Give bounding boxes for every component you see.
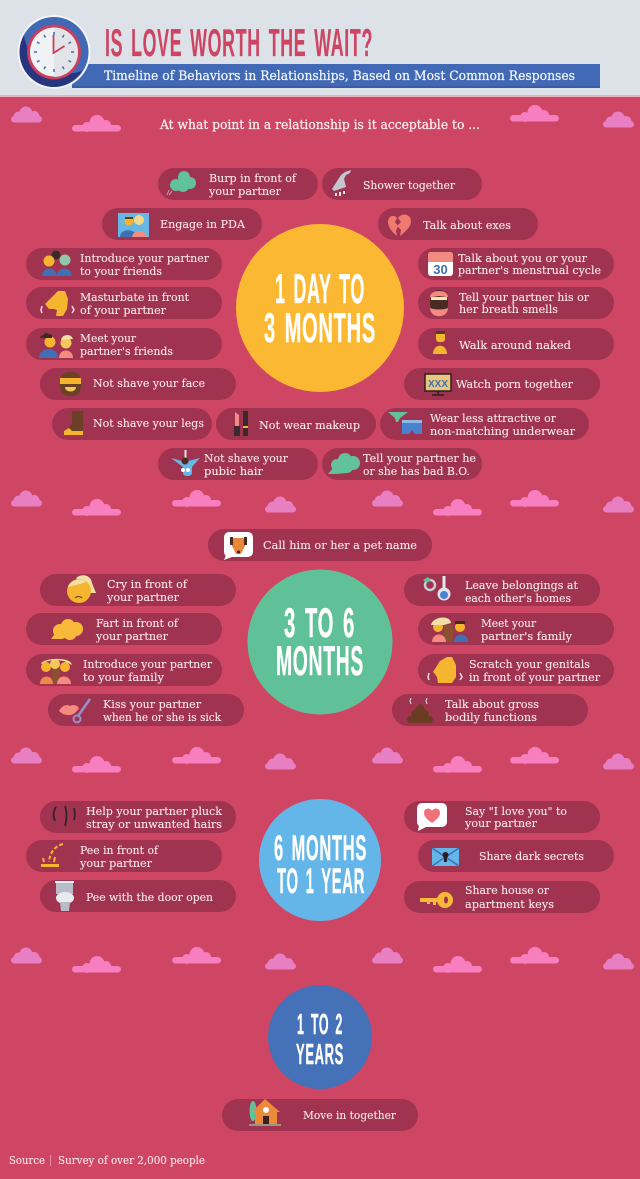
pill: meet family: partner's family <box>481 629 572 643</box>
pill: pluck hairs: stray or unwanted hairs <box>86 817 222 831</box>
circle: 6 months to 1 year <box>259 799 381 921</box>
pill: exes <box>378 208 538 240</box>
icon: house and tree <box>249 1099 281 1126</box>
pill: menstrual cycle: Talk about you or your <box>458 251 587 265</box>
pill: not shave face <box>40 368 236 400</box>
icon: three friends <box>42 250 72 276</box>
pill: fart <box>26 613 222 645</box>
pill: move in together <box>222 1099 418 1131</box>
pill: cry: Cry in front of <box>107 577 188 591</box>
icon: crying face <box>67 575 96 603</box>
circle: 1 day to 3 months: 1 DAY TO <box>275 265 365 312</box>
icon: broken heart <box>388 214 411 236</box>
icon: ring and perfume <box>423 576 450 600</box>
circle: 3 to 6 months <box>248 570 392 714</box>
pill: say I love you: Say "I love you" to <box>465 804 567 818</box>
pill: leave belongings: each other's homes <box>465 591 571 605</box>
pill: pluck hairs: Help your partner pluck <box>86 804 223 818</box>
pill: dark secrets: Share dark secrets <box>479 849 584 863</box>
icon: razor underwear <box>171 450 200 476</box>
pill: bad B.O. <box>322 448 482 480</box>
subtitle banner <box>72 64 600 88</box>
pill: burp: Burp in front of <box>209 171 297 185</box>
icon: keyhole envelope <box>432 848 459 866</box>
source line: Source <box>9 1153 45 1167</box>
pill: pluck hairs <box>40 801 236 833</box>
pill: introduce to family: to your family <box>83 670 164 684</box>
pill: fart: Fart in front of <box>96 616 179 630</box>
pill: pee in front: your partner <box>79 856 152 870</box>
icon: mismatched underwear <box>388 412 422 434</box>
pill: pee in front <box>26 840 222 872</box>
icon: heart speech bubble <box>417 803 447 831</box>
icon: clock <box>18 15 90 89</box>
icon: bearded face <box>60 372 81 396</box>
pill: not shave legs: Not shave your legs <box>93 416 204 430</box>
icon: lips and thermometer <box>59 699 90 722</box>
pill: share keys: Share house or <box>465 883 549 897</box>
icon: green burp cloud <box>167 171 196 195</box>
circle: 1 to 2 years <box>268 985 372 1089</box>
pill: introduce to friends: Introduce your partner <box>80 251 209 265</box>
subtitle banner: Timeline of Behaviors in Relationships, Based on Most Common Responses <box>104 69 575 84</box>
pill: exes: Talk about exes <box>423 218 511 232</box>
pill: introduce to family: Introduce your partner <box>83 657 212 671</box>
pill: not shave pubic hair <box>158 448 318 480</box>
header band <box>0 0 640 97</box>
clouds divider 3 <box>11 947 634 973</box>
icon: calendar 30: 30 <box>433 262 448 277</box>
icon: poop <box>407 698 433 723</box>
pill: menstrual cycle <box>418 248 614 280</box>
clouds: top left <box>11 106 121 132</box>
pill: share keys: apartment keys <box>465 897 554 911</box>
intro question: At what point in a relationship is it acceptable to ... <box>159 118 480 133</box>
pill: meet family: Meet your <box>481 616 536 630</box>
pill: meet family <box>418 613 614 645</box>
pill: cry: your partner <box>106 590 179 604</box>
pill: scratch: in front of your partner <box>469 670 600 684</box>
pill: breath <box>418 287 614 319</box>
pill: not shave pubic hair: Not shave your <box>204 451 288 465</box>
pill: meet friends: Meet your <box>80 331 136 345</box>
source line: Survey of over 2,000 people <box>58 1153 205 1167</box>
pill: door open: Pee with the door open <box>86 890 214 904</box>
pill: bad B.O.: or she has bad B.O. <box>363 464 470 478</box>
pill: kiss when sick: Kiss your partner <box>103 697 201 711</box>
icon: open mouth <box>430 290 448 316</box>
clouds: top right <box>510 105 634 128</box>
pill: gross functions <box>392 694 588 726</box>
pill: introduce to friends <box>26 248 222 280</box>
pill: bad B.O.: Tell your partner he <box>363 451 476 465</box>
pill: not shave face: Not shave your face <box>93 376 205 390</box>
pill: kiss when sick <box>48 694 244 726</box>
icon: calendar 30 <box>428 252 453 277</box>
pill: scratch: Scratch your genitals <box>469 657 590 671</box>
pill: underwear: Wear less attractive or <box>430 411 556 425</box>
icon: scratching hand <box>428 657 462 683</box>
pill: cry <box>40 574 236 606</box>
pill: pet name: Call him or her a pet name <box>263 538 417 552</box>
pill: masturbate <box>26 287 222 319</box>
icon: family <box>40 659 72 684</box>
icon: stray hairs <box>54 806 75 826</box>
pill: kiss when sick: when he or she is sick <box>103 710 222 724</box>
circle: 1 day to 3 months: 3 MONTHS <box>264 304 376 351</box>
pill: pee in front: Pee in front of <box>80 843 159 857</box>
pill: leave belongings <box>404 574 600 606</box>
pill: pet name <box>208 529 432 561</box>
pill: not wear makeup: Not wear makeup <box>259 418 360 432</box>
pill: burp: your partner <box>208 184 281 198</box>
pill: not wear makeup <box>216 408 376 440</box>
icon: dog speech bubble <box>224 532 253 560</box>
icon: lipstick and mascara <box>234 411 248 436</box>
icon: hairy leg <box>64 411 83 435</box>
circle: 1 to 2 years: 1 TO 2 <box>297 1009 343 1041</box>
icon: yellow hand <box>41 291 74 316</box>
pill: door open <box>40 880 236 912</box>
clouds divider 1 <box>11 490 634 516</box>
pill: say I love you <box>404 801 600 833</box>
icon: xxx screen: XXX <box>428 379 448 390</box>
pill: masturbate: Masturbate in front <box>80 290 189 304</box>
pill: meet friends <box>26 328 222 360</box>
icon: pee stream <box>41 844 63 867</box>
pill: underwear: non-matching underwear <box>430 424 575 438</box>
pill: breath: Tell your partner his or <box>459 290 589 304</box>
pill: gross functions: bodily functions <box>445 710 537 724</box>
circle: 1 to 2 years: YEARS <box>296 1039 344 1071</box>
pill: scratch <box>418 654 614 686</box>
pill: breath: her breath smells <box>459 302 558 316</box>
icon: green odour cloud <box>328 453 360 474</box>
pill: PDA: Engage in PDA <box>160 217 246 231</box>
pill: shower <box>322 168 482 200</box>
pill: PDA <box>102 208 262 240</box>
pill: menstrual cycle: partner's menstrual cycle <box>458 263 601 277</box>
pill: dark secrets <box>418 840 614 872</box>
pill: watch porn: Watch porn together <box>456 377 573 391</box>
circle: 6 months to 1 year: TO 1 YEAR <box>277 862 365 901</box>
pill: masturbate: of your partner <box>80 303 166 317</box>
pill: fart: your partner <box>95 629 168 643</box>
circle: 3 to 6 months: MONTHS <box>276 637 364 684</box>
icon: shower head <box>332 170 351 196</box>
pill: share keys <box>404 881 600 913</box>
icon: toilet <box>55 881 74 911</box>
icon: family group <box>431 617 468 642</box>
pill: walk naked <box>418 328 614 360</box>
pill: not shave pubic hair: pubic hair <box>204 464 263 478</box>
clouds divider 2 <box>11 747 634 773</box>
pill: shower: Shower together <box>363 178 455 192</box>
circle: 1 day to 3 months <box>236 224 404 392</box>
icon: xxx screen <box>425 374 451 395</box>
circle: 6 months to 1 year: 6 MONTHS <box>274 829 367 868</box>
pill: move in together: Move in together <box>303 1108 396 1122</box>
icon: naked figure <box>433 331 447 354</box>
pill: say I love you: your partner <box>464 816 537 830</box>
pill: underwear <box>380 408 589 440</box>
icon: yellow fart cloud <box>51 619 83 640</box>
icon: gold key <box>420 892 453 908</box>
pill: introduce to friends: to your friends <box>80 264 162 278</box>
circle: 3 to 6 months: 3 TO 6 <box>284 599 355 646</box>
pill: introduce to family <box>26 654 222 686</box>
pill: burp <box>158 168 318 200</box>
source line <box>9 1153 205 1167</box>
pill: gross functions: Talk about gross <box>445 697 539 711</box>
pill: walk naked: Walk around naked <box>459 338 572 352</box>
pill: meet friends: partner's friends <box>80 344 173 358</box>
icon: couple <box>39 333 73 358</box>
pill: watch porn <box>404 368 600 400</box>
icon: kissing couple picture <box>118 213 149 237</box>
pill: leave belongings: Leave belongings at <box>465 578 578 592</box>
pill: not shave legs <box>52 408 212 440</box>
